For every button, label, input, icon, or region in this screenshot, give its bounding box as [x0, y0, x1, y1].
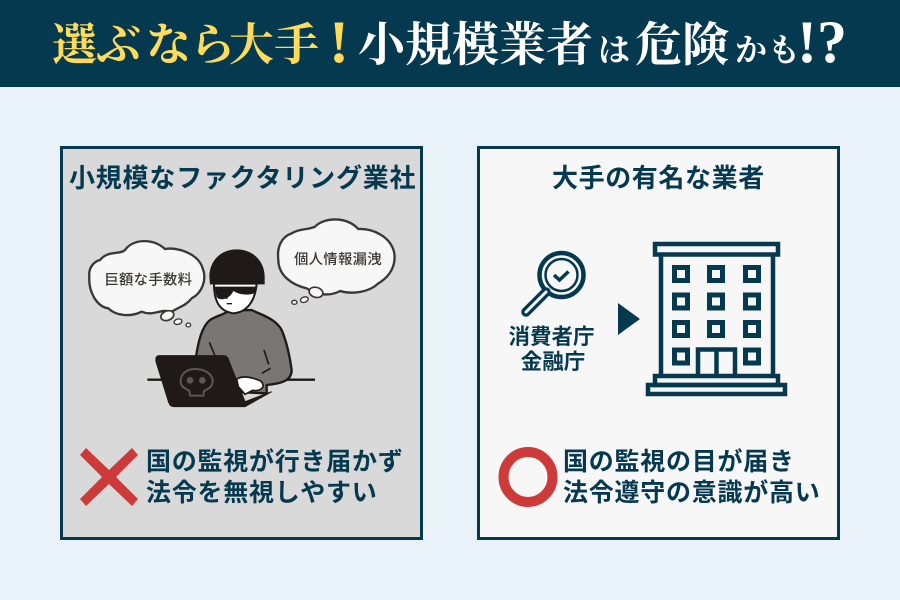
label: regulators: 消費者庁: [508, 325, 595, 349]
title text: かも: [735, 32, 800, 68]
hacker figure: [147, 249, 315, 393]
title text: は: [598, 32, 630, 68]
title text: [52, 9, 847, 75]
title text: 小規模業者: [358, 20, 593, 72]
title banner: [0, 0, 900, 87]
thought bubble: huge fees: 巨額な手数料: [104, 271, 192, 288]
icon: magnifying glass with check: [526, 253, 584, 312]
illustration: hooded hacker with thought bubbles: [89, 219, 395, 407]
thought bubble: personal data leak: 個人情報漏洩: [294, 251, 382, 268]
reassurance text: 法令遵守の意識が高い: [563, 478, 821, 507]
thought bubble: personal data leak: [278, 219, 395, 304]
heading: small-scale companies: 小規模なファクタリング業社: [69, 163, 416, 193]
title text: !?: [797, 9, 847, 75]
warning text: 国の監視が行き届かず: [146, 447, 404, 476]
title text: 選ぶなら大手: [52, 20, 319, 70]
title text: !: [329, 9, 349, 75]
arrow: [618, 303, 640, 335]
icon: office building: [648, 244, 785, 394]
title text: 危険: [635, 20, 729, 72]
panel: major well-known companies: [478, 148, 838, 538]
warning text: [146, 447, 404, 507]
laptop with skull: [156, 356, 272, 407]
label: regulators: 金融庁: [521, 350, 585, 374]
heading: major companies: 大手の有名な業者: [552, 163, 765, 193]
reassurance text: 国の監視の目が届き: [563, 447, 795, 476]
mark: cross: [80, 448, 138, 506]
warning text: 法令を無視しやすい: [146, 479, 378, 507]
reassurance text: [563, 447, 821, 507]
panel: small-scale factoring companies: [62, 148, 422, 538]
thought bubble: huge fees: [89, 241, 204, 327]
label: regulators: [508, 325, 595, 374]
mark: circle: [504, 452, 552, 502]
hand on keyboard: [237, 377, 263, 394]
